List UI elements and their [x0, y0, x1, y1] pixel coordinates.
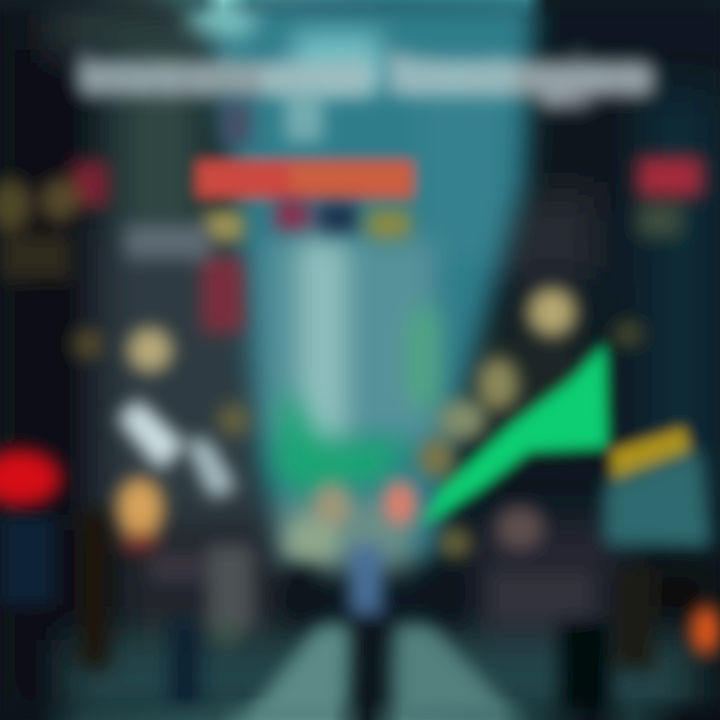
green area chart arrow [420, 342, 608, 528]
orange light [692, 606, 720, 654]
foreground figure [350, 545, 388, 720]
red sign banner [196, 160, 414, 198]
amber light [117, 478, 163, 552]
top sky edge [4, 0, 550, 16]
white streak [118, 400, 236, 498]
foreground crowd [0, 510, 655, 720]
yellow sign [610, 426, 692, 484]
road lanes [245, 625, 520, 720]
right-side elements [418, 158, 702, 478]
left-side lights [0, 162, 250, 436]
background: central teal tower [190, 0, 535, 570]
green left area [270, 310, 436, 495]
title [77, 41, 655, 142]
red light [0, 451, 60, 505]
teal sign [604, 450, 712, 548]
pink and orange lights [286, 481, 544, 562]
bottom road edge [51, 699, 720, 720]
sign detail blocks [205, 100, 410, 240]
title: Investment Strategies [77, 41, 647, 104]
